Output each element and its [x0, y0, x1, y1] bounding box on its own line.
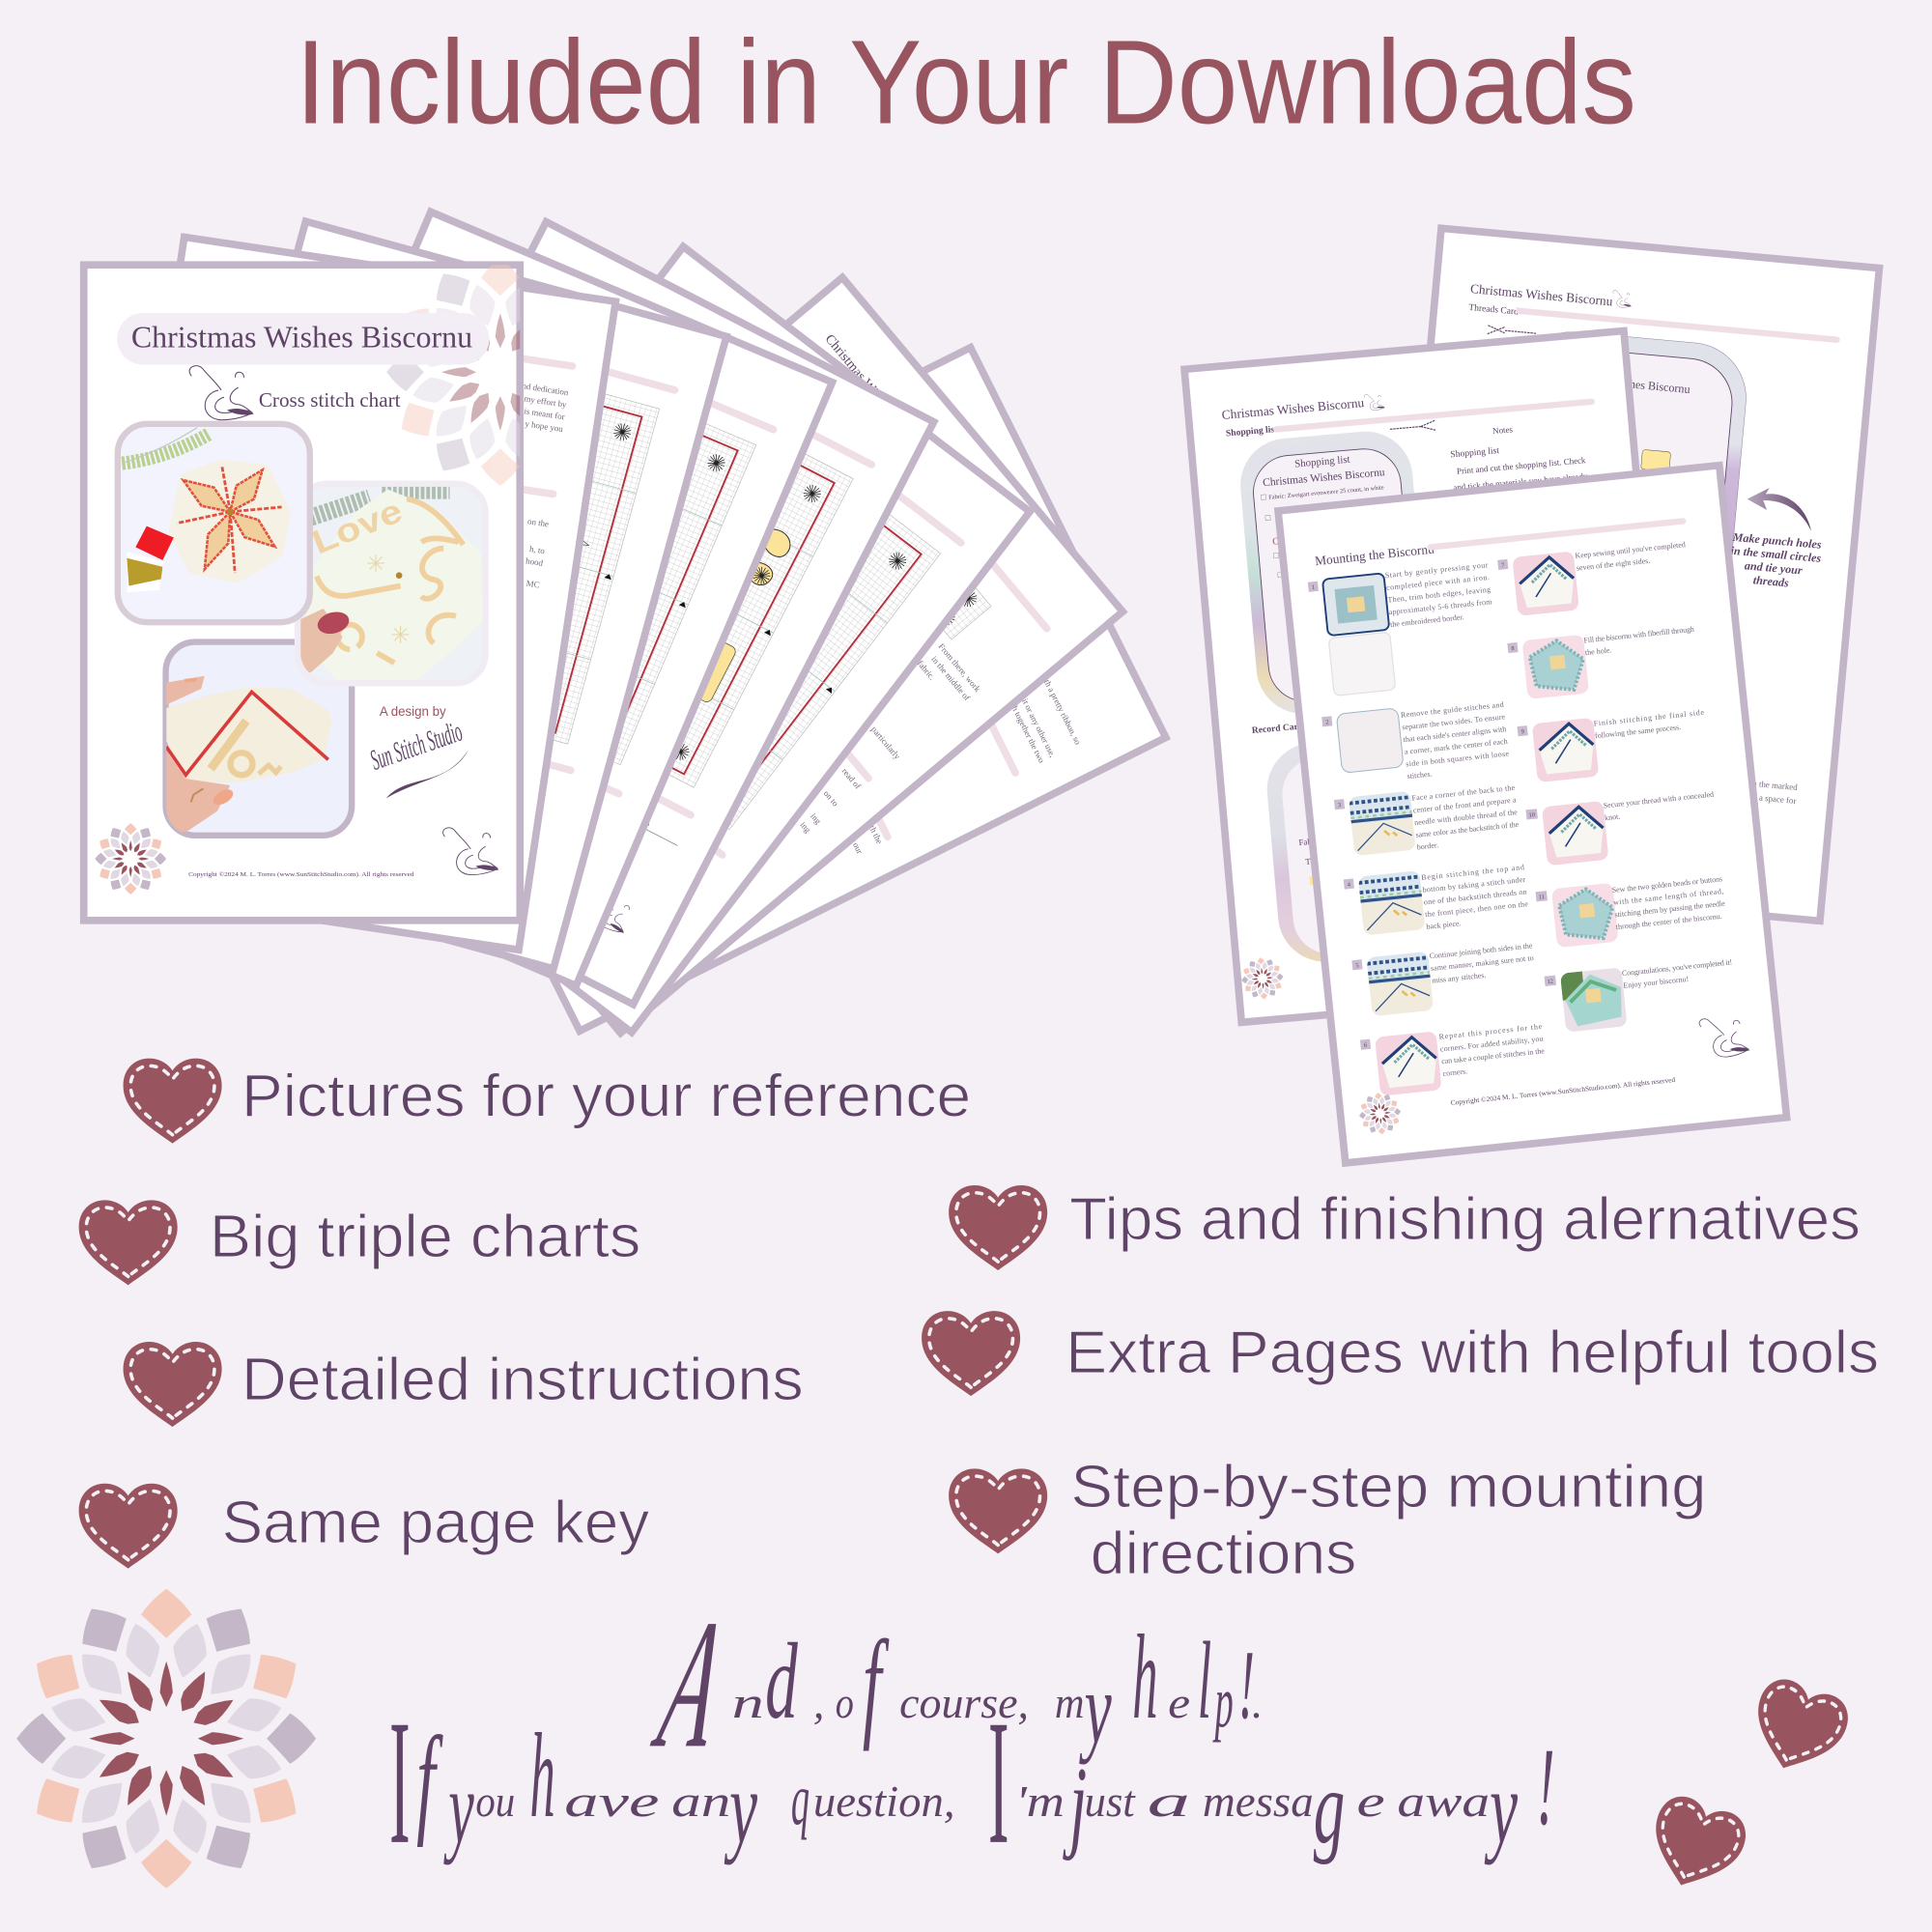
bullet: pictures for your reference: Pictures for your reference: [242, 1063, 971, 1130]
step 1: approximately 5-6 threads from: [1388, 597, 1493, 616]
step 6: can take a couple of stitches in the: [1441, 1046, 1546, 1065]
photo: love biscornu: [297, 484, 486, 683]
step 6: corners.: [1442, 1066, 1467, 1078]
closing message: messa: [1203, 1776, 1314, 1826]
step 4: 4: [1347, 881, 1351, 889]
page 3: introduction text: my effort by: [524, 393, 568, 410]
closing message: y: [1484, 1749, 1518, 1865]
title: Included in Your Downloads: [296, 16, 1636, 150]
step 4: one of the backstitch threads on: [1423, 887, 1527, 906]
page: threads card: Christmas Wishes Biscornu: [1561, 371, 1690, 396]
page: shopping list: Notes: [1492, 424, 1514, 436]
page 9: finishing text: our: [851, 840, 865, 856]
page: threads card: Christmas Wishes Biscornu: [1469, 281, 1613, 308]
closing message: !: [1238, 1631, 1255, 1740]
step 11: through the center of the biscornu.: [1615, 912, 1722, 931]
note: punch holes: threads: [1752, 573, 1790, 589]
step 4: back piece.: [1426, 919, 1462, 931]
step 4: Begin stitching the top and: [1421, 863, 1524, 882]
page 8: stitching text: ing: [798, 820, 813, 835]
step 4: [1344, 860, 1530, 939]
step 5: miss any stitches.: [1432, 971, 1487, 985]
bullet: same page key: Same page key: [222, 1489, 650, 1556]
bullet: tips and finishing alternatives: Tips and finishing alernatives: [1069, 1185, 1861, 1253]
bullet: extra pages: [922, 1311, 1879, 1396]
page 3: introduction text: is meant for: [524, 406, 565, 421]
closing message: [389, 1580, 1555, 1881]
page mandala: [1357, 1091, 1403, 1137]
closing message: f: [863, 1616, 890, 1752]
closing message: !: [1537, 1724, 1555, 1848]
page: shopping list: Shopping list: [1294, 454, 1350, 470]
page 9: finishing text: with a pretty ribbon, so: [1038, 670, 1083, 747]
icon: curved arrow: [1747, 488, 1811, 531]
page 6: chart: [245, 222, 934, 1005]
step 6: Repeat this process for the: [1438, 1022, 1543, 1041]
page: mounting the biscornu: [1278, 466, 1787, 1163]
step 10: Secure your thread with a concealed: [1603, 790, 1714, 810]
step 4: bottom by taking a stitch under: [1422, 875, 1526, 895]
closing message: j: [1063, 1746, 1087, 1861]
step 5: Continue joining both sides in the: [1429, 941, 1533, 960]
step 3: border.: [1416, 840, 1439, 851]
step 9: following the same process.: [1595, 723, 1682, 740]
page 8: stitching text: ing: [809, 811, 823, 826]
step 9: [1517, 706, 1710, 784]
page 3: introduction text: and dedication: [518, 381, 570, 397]
step 2: 2: [1325, 719, 1329, 725]
step 3: Face a corner of the back to the: [1411, 783, 1516, 803]
bullet: big triple charts: Big triple charts: [210, 1203, 640, 1270]
step 6: corners. For added stability, you: [1439, 1035, 1544, 1054]
note: punch holes: in the small circles: [1730, 544, 1822, 565]
step 2: side in both squares with loose: [1406, 749, 1510, 768]
step 10: [1525, 789, 1719, 867]
step 3: same color as the backstitch of the: [1415, 820, 1520, 839]
page: shopping list: and tick the materials you have already.: [1453, 470, 1589, 493]
icon: swirl ornament: [189, 366, 254, 420]
page: shopping list: [1184, 331, 1681, 1022]
page: shopping list: Fabric: [1298, 836, 1321, 847]
photo: love biscornu: Love: [307, 493, 408, 561]
closing message: m: [1055, 1678, 1084, 1727]
page 5: chart: [175, 212, 833, 985]
closing message: ave: [564, 1776, 659, 1826]
step 8: [1507, 623, 1699, 701]
page: threads card: in the marked: [1749, 779, 1799, 792]
closing message: y: [443, 1748, 474, 1864]
step 1: completed piece with an iron.: [1386, 573, 1490, 592]
step 10: knot.: [1605, 812, 1621, 822]
step 2: that each side's center aligns with: [1403, 724, 1507, 744]
cover title: Christmas Wishes Biscornu: [131, 321, 472, 355]
step 2: a corner, mark the center of each: [1405, 737, 1508, 756]
note: punch holes: Make punch holes: [1731, 530, 1822, 552]
page 9: finishing text: g it or any other use,: [1017, 692, 1058, 759]
page: shopping list: Print and cut the shopping list. Check: [1457, 455, 1586, 476]
page 6: chart: old: [629, 834, 643, 847]
large mandala: [16, 1589, 316, 1889]
note: punch holes: [1730, 530, 1822, 589]
page 8: stitching text: From there, work: [936, 641, 982, 695]
page: threads card: Threads Card: [1468, 302, 1520, 318]
page copyright: Copyright ©2024 M. L. Torres (www.SunStitchStudio.com). All rights reserved: [1450, 1076, 1676, 1107]
bullet: tips and finishing alternatives: [949, 1185, 1861, 1270]
step 3: [1334, 781, 1520, 860]
closing message: course,: [899, 1678, 1029, 1727]
closing message: 'm: [1015, 1776, 1065, 1826]
step 2: [1321, 697, 1511, 789]
step 3: center of the front and prepare a: [1412, 795, 1517, 814]
closing message: y: [724, 1749, 757, 1865]
step 10: 10: [1528, 811, 1535, 819]
step 5: [1351, 941, 1538, 1018]
heart: upper right: [1741, 1673, 1855, 1783]
cover watermark mandala: [386, 265, 520, 486]
closing message: l: [1198, 1620, 1211, 1743]
bullet: pictures for your reference: [124, 1059, 971, 1144]
bullet: detailed instructions: [124, 1342, 804, 1427]
page 8: stitching text: [340, 277, 1122, 1033]
step 12: [1544, 955, 1738, 1034]
icon: cover corner swirl: [443, 828, 499, 875]
page: shopping list: Record Card: [1251, 721, 1304, 736]
page: shopping list: Pattern: [1322, 909, 1347, 920]
closing message: n: [732, 1678, 764, 1727]
closing message: .: [1252, 1678, 1263, 1727]
closing message: e: [1356, 1776, 1385, 1826]
page 6: chart: e: [643, 819, 652, 830]
page 3: introduction text: MC: [526, 579, 540, 590]
page: shopping list: Or: [1272, 536, 1284, 548]
closing message: I: [988, 1684, 1009, 1881]
bullet: same page key: [79, 1484, 650, 1569]
step 12: Enjoy your biscornu!: [1623, 975, 1690, 990]
bullet: step-by-step mounting directions: Step-by-step mounting: [1070, 1453, 1707, 1520]
step 1: 1: [1312, 584, 1315, 591]
step 12: 12: [1547, 979, 1553, 985]
closing message: y: [1079, 1651, 1112, 1765]
step 1: [1307, 560, 1500, 697]
page: shopping list: Christmas Wishes Biscornu: [1221, 395, 1365, 422]
closing message: ,: [813, 1678, 824, 1727]
page 8: stitching text: fabric.: [916, 659, 937, 682]
closing message: an: [671, 1776, 730, 1826]
step 1: Then, trim both edges, leaving: [1387, 585, 1492, 605]
step 11: with the same length of thread,: [1613, 887, 1724, 907]
cover title pill: [117, 313, 489, 365]
page: shopping list: Shopping list: [1450, 445, 1500, 460]
step 11: 11: [1538, 894, 1545, 901]
cover mandala: [95, 823, 166, 895]
closing message: f: [416, 1712, 443, 1849]
step 2: separate the two sides. To ensure: [1402, 712, 1506, 731]
step 8: Fill the biscornu with fiberfill through: [1583, 625, 1694, 644]
page: threads card: e a space for: [1752, 792, 1797, 806]
step 4: the front piece, then one on the: [1425, 899, 1529, 919]
step 11: [1535, 871, 1728, 950]
logo: Sun Stitch Studio signature: Sun Stitch Studio: [367, 716, 467, 777]
page: shopping list: Christmas Wishes Biscornu: [1263, 467, 1385, 489]
step 7: seven of the eight sides.: [1576, 556, 1651, 573]
page 9: finishing text: [384, 348, 1166, 1031]
page swirl: [1699, 1014, 1750, 1060]
closing message: p: [1212, 1662, 1234, 1744]
page 8: stitching text: in the middle of: [929, 654, 972, 702]
panel: extra tool pages: [1184, 228, 1879, 1163]
closing message: q: [791, 1759, 810, 1840]
step 6: [1360, 1020, 1548, 1097]
step 1: the embroidered border.: [1390, 612, 1464, 629]
closing message: A: [640, 1580, 741, 1786]
note: punch holes: and tie your: [1744, 558, 1804, 577]
heart: lower right: [1638, 1790, 1752, 1901]
step 6: 6: [1364, 1042, 1368, 1049]
step 2: Remove the guide stitches and: [1401, 700, 1504, 720]
step 9: 9: [1520, 728, 1524, 735]
bullet: detailed instructions: Detailed instructions: [242, 1346, 804, 1413]
closing message: g: [1314, 1749, 1345, 1865]
page: shopping list: Or: [1288, 627, 1299, 639]
closing message: ou: [475, 1776, 515, 1826]
page 8: stitching text: read of: [840, 766, 863, 791]
closing message: h: [529, 1709, 555, 1842]
credit: a design by: A design by: [380, 704, 446, 719]
photo: joy biscornu: [166, 642, 352, 838]
page: shopping list: Gift: [1326, 926, 1340, 936]
closing message: d: [765, 1623, 798, 1743]
step 1: Start by gently pressing your: [1384, 560, 1489, 580]
page: shopping list: Thread: [1305, 855, 1330, 867]
page 3: introduction text: y hope you: [525, 418, 564, 434]
page 9: finishing text: ch together the two: [1009, 701, 1047, 765]
page: shopping list: Shopping list: [1226, 424, 1278, 439]
closing message: ust: [1084, 1776, 1136, 1826]
page 8: stitching text: particularly: [869, 724, 902, 761]
step 11: stitching them by passing the needle: [1614, 899, 1726, 919]
closing message: a: [1148, 1776, 1190, 1826]
panel: fanned chart pages: [84, 212, 1166, 1033]
step 7: Keep sewing until you've completed: [1575, 540, 1686, 560]
step 8: the hole.: [1584, 645, 1612, 657]
closing message: I: [389, 1684, 411, 1881]
page 3: introduction text: h, to: [528, 544, 546, 555]
page 7: chart: [285, 246, 1030, 1033]
bullet: step-by-step mounting directions: directions: [1091, 1520, 1356, 1587]
page 3: introduction text: [87, 237, 615, 950]
page 3: introduction text: hood: [526, 555, 544, 568]
bullet: big triple charts: [79, 1200, 640, 1285]
step 11: Sew the two golden beads or buttons: [1611, 874, 1722, 895]
step 12: Congratulations, you've completed it!: [1622, 957, 1733, 978]
bullet: extra pages: Extra Pages with helpful tools: [1065, 1319, 1879, 1386]
step 8: 8: [1511, 645, 1515, 652]
closing message: awa: [1397, 1776, 1490, 1826]
closing message: h: [1132, 1610, 1157, 1744]
step 2: stitches.: [1406, 770, 1433, 781]
photo: star biscornu: [118, 424, 310, 622]
step 5: 5: [1355, 962, 1359, 969]
step 3: 3: [1338, 802, 1342, 809]
page 4: chart: [132, 221, 726, 969]
step 7: [1497, 539, 1690, 617]
cover subtitle: Cross stitch chart: [259, 388, 401, 412]
step 7: 7: [1501, 562, 1505, 569]
copyright line: Copyright ©2024 M. L. Torres (www.SunStitchStudio.com). All rights reserved: [188, 871, 414, 878]
page: threads card: [1381, 228, 1879, 921]
closing message: o: [836, 1678, 854, 1727]
page 8: stitching text: on to: [822, 788, 840, 809]
page: shopping list: Fabric: Zweigart evenweave 25 count, in white: [1268, 484, 1384, 501]
closing message: e: [1168, 1678, 1190, 1727]
page 9: finishing text: th the: [867, 824, 885, 845]
page 8: stitching text: Christmas Wishes Biscornu: [822, 331, 930, 456]
page: cover: [79, 261, 524, 924]
step 9: Finish stitching the final side: [1593, 708, 1705, 728]
bullet: step-by-step mounting directions: [949, 1453, 1707, 1587]
closing message: uestion,: [813, 1776, 955, 1826]
step 3: needle with double thread of the: [1414, 808, 1519, 827]
page 3: introduction text: on the: [527, 516, 550, 528]
step 5: same manner, making sure not to: [1431, 953, 1534, 973]
mounting heading: Mounting the Biscornu: [1314, 541, 1435, 568]
